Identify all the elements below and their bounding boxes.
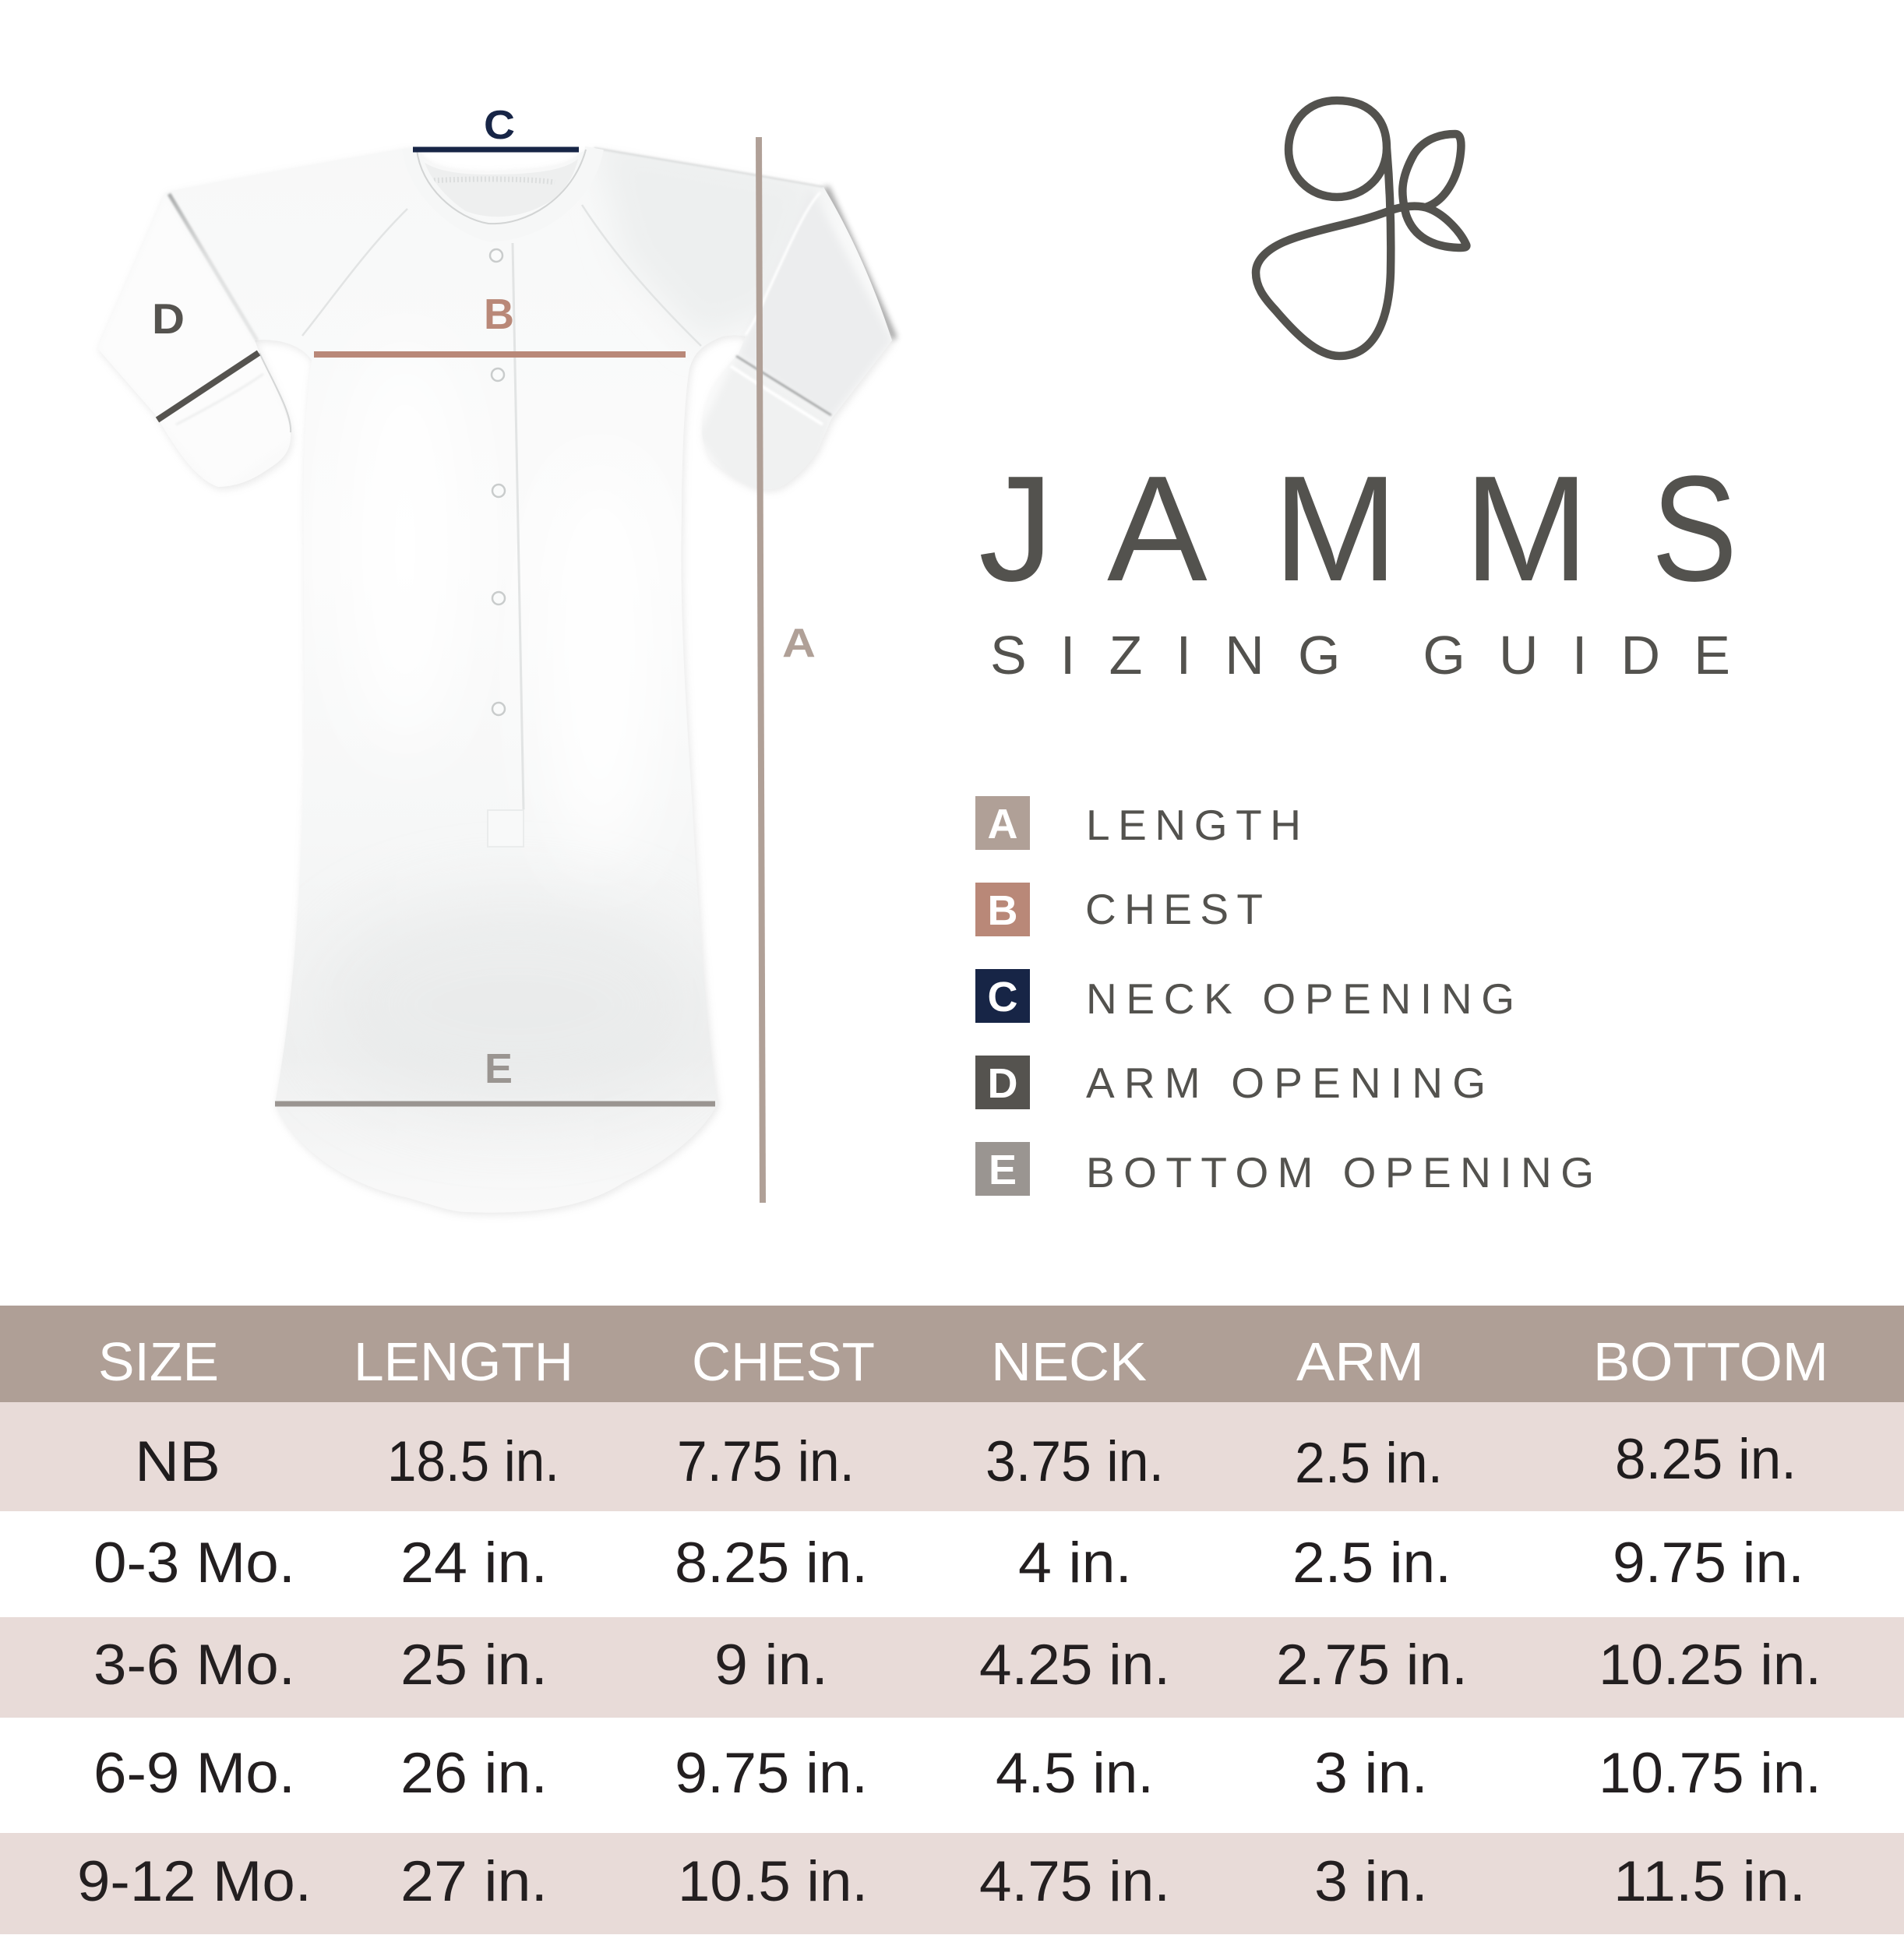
row: 9-12 Mo.: 10.5 in. (678, 1850, 868, 1913)
row: NB: 3.75 in. (985, 1430, 1164, 1493)
measure line B: chest (314, 351, 686, 358)
row: 3-6 Mo.: 10.25 in. (1599, 1634, 1821, 1697)
row: 3-6 Mo. (0, 1617, 1904, 1718)
legend item B (975, 883, 1263, 936)
row: 3-6 Mo.: 3-6 Mo. (93, 1634, 295, 1697)
row: 6-9 Mo.: 10.75 in. (1599, 1742, 1821, 1805)
back neck panel (421, 159, 578, 217)
label B: B (484, 290, 514, 338)
back neck ribbing (430, 179, 555, 182)
row: NB: 18.5 in. (387, 1430, 559, 1493)
right mitten tone (703, 365, 826, 489)
label D: D (152, 294, 185, 343)
measure line A: length (759, 137, 763, 1203)
label A: A (782, 621, 816, 666)
legend item A (975, 796, 1301, 850)
top edge line (594, 148, 823, 187)
collar seam (417, 150, 586, 224)
row: 0-3 Mo. (93, 1531, 1804, 1595)
legend item E: E (989, 1147, 1017, 1193)
placket edge (513, 243, 524, 809)
table header row: LENGTH (354, 1331, 573, 1392)
title: JAMMS: S (1652, 444, 1737, 612)
row: 3-6 Mo.: 4.25 in. (979, 1634, 1170, 1697)
row: 3-6 Mo.: 25 in. (400, 1634, 548, 1697)
mitten cuffs (176, 353, 831, 432)
raglan seams (302, 205, 701, 346)
legend item D: D (988, 1060, 1017, 1107)
legend item D: ARM OPENING (1086, 1059, 1486, 1107)
row: 9-12 Mo.: 27 in. (400, 1850, 548, 1913)
legend item A: LENGTH (1086, 801, 1301, 849)
row: 0-3 Mo.: 9.75 in. (1613, 1531, 1804, 1595)
row: 0-3 Mo.: 24 in. (400, 1531, 548, 1595)
row: 3-6 Mo.: 2.75 in. (1276, 1634, 1468, 1697)
row: 6-9 Mo.: 3 in. (1314, 1742, 1428, 1805)
collar band (411, 148, 594, 232)
row: 0-3 Mo.: 8.25 in. (675, 1531, 868, 1595)
table header row: BOTTOM (1593, 1331, 1828, 1392)
measure line E: bottom (275, 1101, 715, 1106)
row: 0-3 Mo.: 4 in. (1018, 1531, 1132, 1595)
legend item C: NECK OPENING (1086, 975, 1514, 1023)
legend item E: BOTTOM OPENING (1086, 1148, 1594, 1197)
legend item C: C (988, 974, 1017, 1020)
placket tab (488, 810, 524, 847)
legend (975, 796, 1594, 1197)
garment body (78, 117, 919, 1223)
measure line D: arm (157, 353, 259, 420)
snap buttons (490, 249, 505, 715)
right sleeve tone (742, 215, 890, 414)
row: 0-3 Mo.: 0-3 Mo. (93, 1531, 295, 1595)
legend item B: CHEST (1085, 885, 1263, 933)
subtitle: SIZING GUIDE: SIZING GUIDE (990, 625, 1730, 686)
label C: C (484, 103, 515, 148)
row: 0-3 Mo.: 2.5 in. (1292, 1531, 1451, 1595)
table header row: NECK (991, 1331, 1147, 1392)
row: NB (0, 1402, 1904, 1511)
row: 9-12 Mo.: 4.75 in. (979, 1850, 1170, 1913)
table header row: SIZE (98, 1331, 219, 1392)
table header row: ARM (1296, 1331, 1424, 1392)
table header row: CHEST (692, 1331, 875, 1392)
logo: looped g with leaves (1256, 100, 1466, 356)
row: 6-9 Mo.: 6-9 Mo. (93, 1742, 295, 1805)
row: NB: NB (135, 1430, 220, 1493)
row: NB: 2.5 in. (1295, 1432, 1443, 1495)
left sleeve tone (97, 192, 296, 491)
legend item A: A (988, 801, 1017, 848)
row: 9-12 Mo. (0, 1833, 1904, 1934)
row: 6-9 Mo.: 9.75 in. (675, 1742, 868, 1805)
garment: white baby gown (78, 117, 919, 1223)
legend item B: B (988, 887, 1017, 934)
sizing table (0, 1306, 1904, 1934)
row: 3-6 Mo.: 9 in. (714, 1634, 828, 1697)
row: 6-9 Mo.: 26 in. (400, 1742, 548, 1805)
row: NB: 8.25 in. (1615, 1428, 1796, 1491)
measure line C: neck (413, 146, 579, 153)
row: 9-12 Mo.: 11.5 in. (1613, 1850, 1806, 1913)
row: 9-12 Mo.: 9-12 Mo. (77, 1850, 312, 1913)
right sleeve edge shadow (826, 187, 894, 339)
garment soft shadow (99, 150, 894, 1215)
row: 6-9 Mo. (93, 1742, 1821, 1805)
right shoulder tone (614, 155, 802, 326)
right sleeve fold highlight (746, 192, 820, 335)
table header row (0, 1306, 1904, 1402)
label E: E (485, 1045, 513, 1092)
row: 6-9 Mo.: 4.5 in. (996, 1742, 1154, 1805)
row: 9-12 Mo.: 3 in. (1314, 1850, 1428, 1913)
row: NB: 7.75 in. (677, 1430, 855, 1493)
left sleeve fold shadow (169, 194, 257, 340)
title: JAMMS: JAMM (978, 444, 1589, 612)
